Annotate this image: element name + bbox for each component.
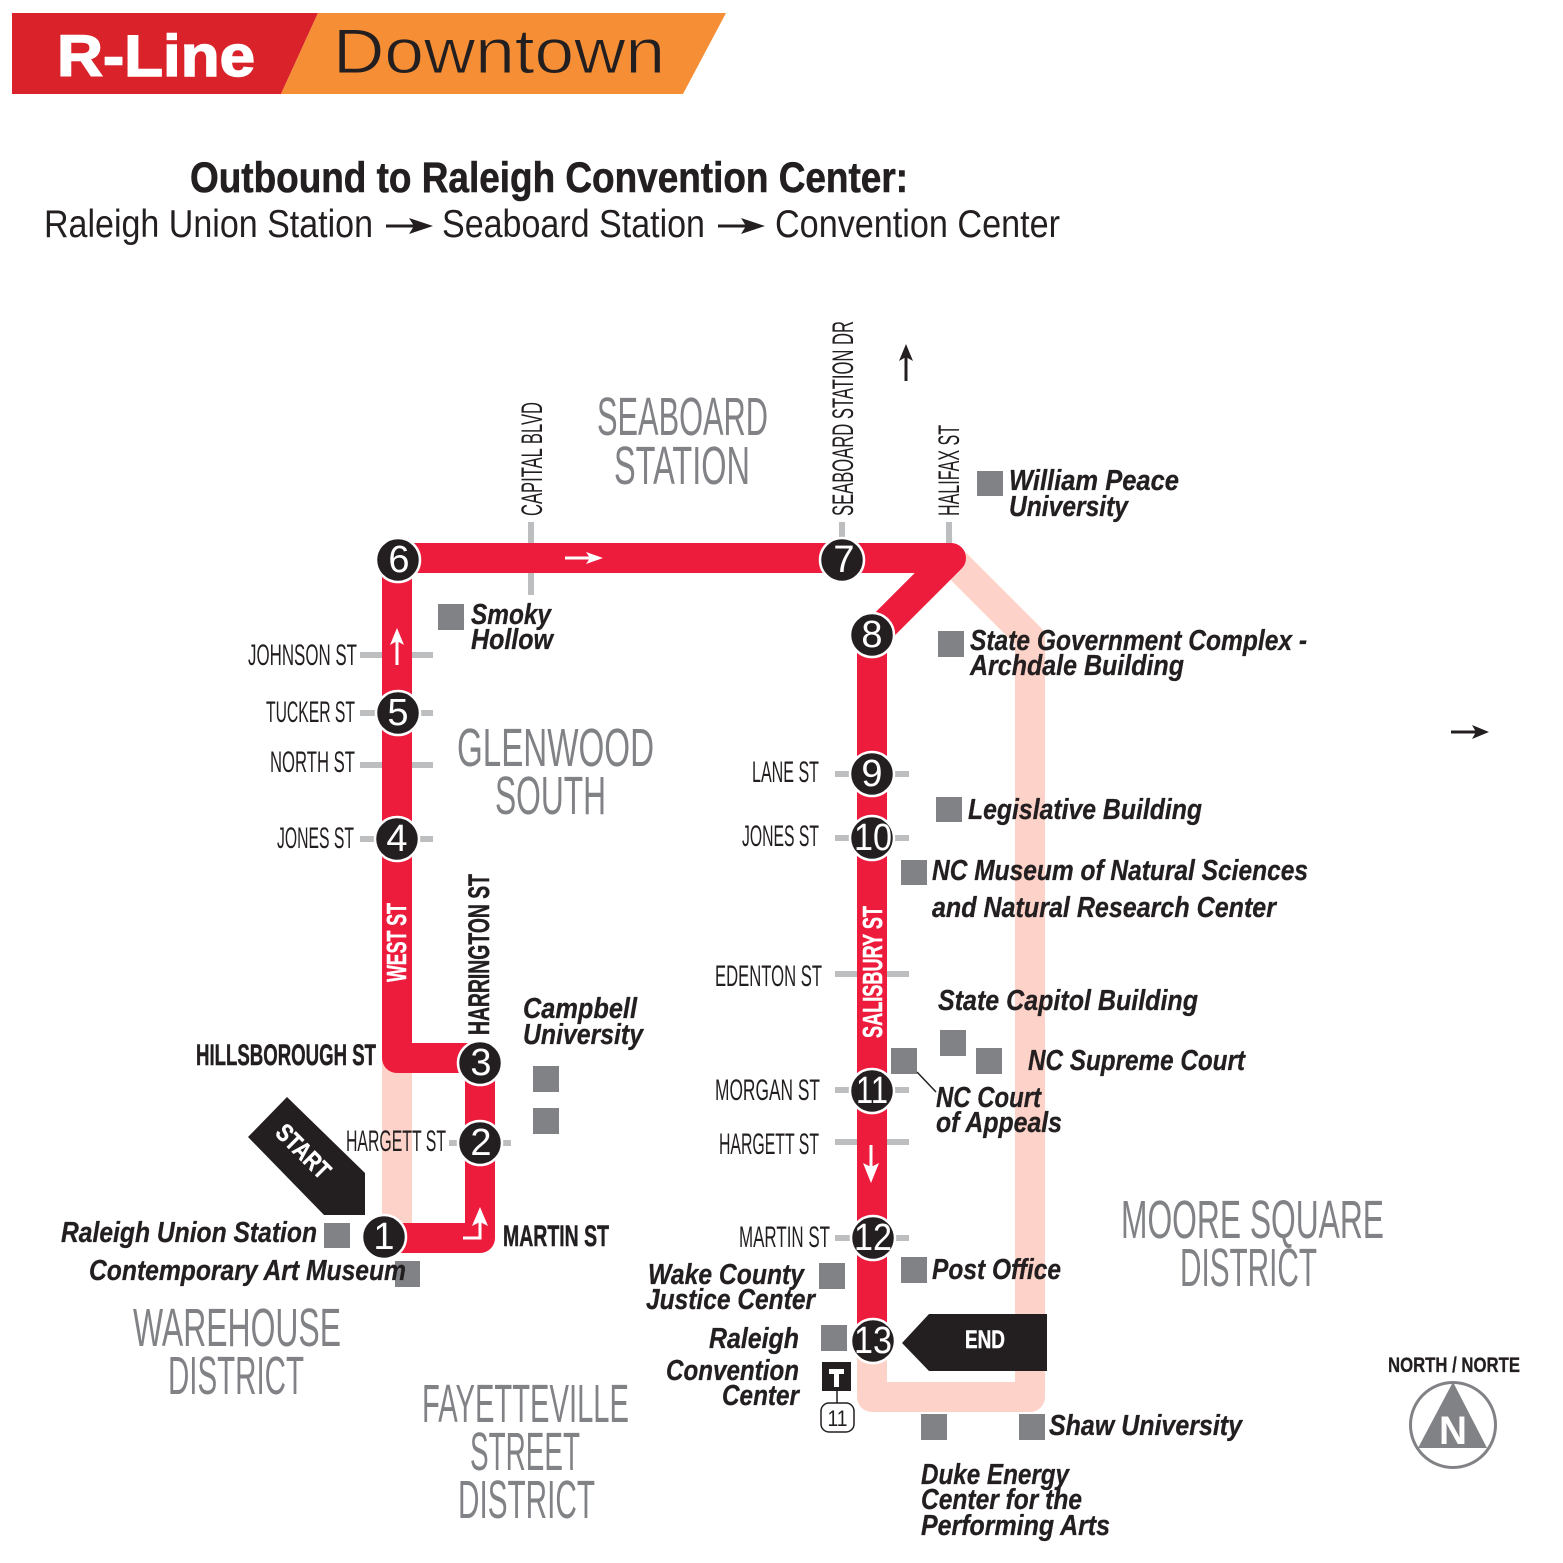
- compass triangle: [1418, 1382, 1487, 1448]
- route direction heading: [44, 154, 1060, 246]
- district: Moore Square: DISTRICT: [1180, 1238, 1317, 1298]
- district: Warehouse: [133, 1298, 341, 1406]
- compass label: NORTH / NORTE: [1388, 1354, 1520, 1377]
- Wake County Justice Center: [646, 1259, 816, 1316]
- district: Moore Square: MOORE SQUARE: [1121, 1190, 1384, 1250]
- district labels: [133, 387, 1384, 1530]
- start flag: START: [270, 1118, 336, 1185]
- cross street ticks: [360, 522, 949, 1238]
- NC Museum of Natural Sciences: and Natural Research Center: [932, 892, 1277, 924]
- street labels: horizontal east side: HARGETT ST: [719, 1128, 819, 1161]
- header banner: [12, 13, 726, 94]
- district: Glenwood South: [457, 718, 654, 826]
- district: Fayetteville Street: STREET: [470, 1422, 580, 1482]
- arrow to Seaboard Station: [386, 218, 433, 234]
- station numbers: 8: [861, 614, 883, 656]
- arrow to Convention Center: [718, 218, 765, 234]
- Duke Energy Center for the Performing Arts: Duke Energy: [921, 1459, 1071, 1491]
- Raleigh Union Station: Raleigh Union Station: [61, 1217, 317, 1249]
- station numbers: [373, 539, 892, 1362]
- pale segment east side: [872, 559, 1030, 1397]
- street labels: on-route names: [381, 903, 888, 1038]
- station markers: [362, 538, 895, 1363]
- Raleigh Convention Center: Raleigh: [709, 1323, 799, 1355]
- State Government Complex: [969, 625, 1307, 682]
- station numbers: 11: [856, 1070, 888, 1112]
- district: Glenwood South: GLENWOOD: [457, 718, 654, 778]
- Campbell University: [523, 993, 645, 1051]
- street labels: horizontal east side: LANE ST: [752, 756, 819, 789]
- origin label: Raleigh Union Station: [44, 203, 373, 246]
- street labels: vertical: CAPITAL BLVD: [516, 402, 549, 516]
- district: Seaboard Station: SEABOARD: [597, 387, 768, 447]
- NC Court of Appeals: NC Court: [936, 1082, 1042, 1114]
- banner orange segment: [281, 13, 726, 94]
- Wake County Justice Center: Justice Center: [646, 1284, 816, 1316]
- red segment from Martin St to Seaboard and back: [383, 558, 951, 1340]
- district: Warehouse: WAREHOUSE: [133, 1298, 341, 1358]
- station numbers: 2: [470, 1122, 492, 1164]
- street labels: horizontal west side: HARGETT ST: [346, 1125, 446, 1158]
- street labels: horizontal east side: MARTIN ST: [739, 1221, 830, 1254]
- NC Supreme Court: NC Supreme Court: [1028, 1045, 1246, 1077]
- street labels: horizontal east side: JONES ST: [742, 820, 819, 853]
- pale segment west side: [382, 1058, 412, 1238]
- station numbers: 5: [387, 692, 409, 734]
- street labels: horizontal west side: HILLSBOROUGH ST: [196, 1039, 376, 1072]
- banner red segment: [12, 13, 318, 94]
- off-map arrow: north: [899, 344, 913, 381]
- State Government Complex: Archdale Building: [969, 650, 1184, 682]
- station numbers: 4: [386, 818, 408, 860]
- Contemporary Art Museum: Contemporary Art Museum: [89, 1255, 406, 1287]
- Smoky Hollow: Smoky: [471, 599, 553, 631]
- street labels: horizontal west side: MARTIN ST: [503, 1220, 609, 1253]
- State Government Complex: State Government Complex -: [970, 625, 1307, 657]
- street labels: horizontal west side: NORTH ST: [270, 746, 355, 779]
- Campbell University: University: [523, 1019, 645, 1051]
- Wake County Justice Center: Wake County: [648, 1259, 806, 1291]
- banner label: Downtown: Downtown: [333, 17, 665, 87]
- middle stop label: Seaboard Station: [442, 203, 705, 246]
- district: Glenwood South: SOUTH: [495, 766, 606, 826]
- outbound route (red line): [383, 558, 951, 1340]
- station numbers: 12: [854, 1217, 892, 1259]
- district: Seaboard Station: STATION: [614, 436, 750, 496]
- street labels: horizontal east side: [715, 756, 830, 1254]
- Duke Energy Center for the Performing Arts: [921, 1459, 1110, 1542]
- transit icon with route 11: [821, 1362, 854, 1432]
- Legislative Building: Legislative Building: [968, 794, 1202, 826]
- landmark squares: [324, 471, 1045, 1440]
- Campbell University: Campbell: [523, 993, 638, 1025]
- NC Court of Appeals: of Appeals: [936, 1107, 1062, 1139]
- NC Museum of Natural Sciences: [932, 855, 1308, 924]
- street labels: vertical: SEABOARD STATION DR: [827, 321, 860, 516]
- district: Seaboard Station: [597, 387, 768, 496]
- Smoky Hollow: [471, 599, 555, 656]
- West St label: WEST ST: [381, 903, 412, 982]
- Duke Energy Center for the Performing Arts: Center for the: [921, 1484, 1082, 1516]
- Post Office: Post Office: [932, 1254, 1061, 1286]
- NC Court of Appeals: [936, 1082, 1062, 1139]
- street labels: horizontal west side: JOHNSON ST: [248, 639, 357, 672]
- start flag: [248, 1097, 365, 1215]
- arrow: north on West St: [390, 628, 404, 665]
- William Peace University: William Peace: [1009, 465, 1179, 497]
- station numbers: 6: [388, 539, 410, 581]
- arrow: south on Salisbury St: [863, 1145, 879, 1183]
- district: Fayetteville Street: FAYETTEVILLE: [422, 1374, 629, 1434]
- end flag: [902, 1314, 1047, 1371]
- end flag: END: [965, 1326, 1005, 1354]
- north compass: [1388, 1354, 1520, 1468]
- street labels: horizontal west side: JONES ST: [277, 822, 354, 855]
- Shaw University: Shaw University: [1049, 1410, 1244, 1442]
- district: Fayetteville Street: [422, 1374, 629, 1530]
- Smoky Hollow: Hollow: [471, 624, 555, 656]
- State Capitol Building: State Capitol Building: [938, 985, 1198, 1017]
- arrow: east on red line: [565, 552, 603, 564]
- station numbers: 3: [470, 1042, 492, 1084]
- landmark labels: [61, 465, 1308, 1542]
- Salisbury St label: SALISBURY ST: [857, 906, 888, 1038]
- compass ring: [1410, 1382, 1496, 1468]
- station numbers: 13: [854, 1320, 892, 1362]
- station numbers: 10: [854, 817, 892, 859]
- street labels: horizontal west side: [196, 639, 609, 1253]
- direction arrows on the route: [390, 552, 879, 1238]
- street labels: vertical: HALIFAX ST: [933, 425, 966, 516]
- inbound route (pale line): [397, 559, 1030, 1397]
- William Peace University: University: [1009, 491, 1130, 523]
- Duke Energy Center for the Performing Arts: Performing Arts: [921, 1510, 1110, 1542]
- district: Fayetteville Street: DISTRICT: [458, 1470, 595, 1530]
- street labels: horizontal east side: MORGAN ST: [715, 1074, 820, 1107]
- Raleigh Convention Center: Center: [722, 1380, 800, 1412]
- off-map arrow: east: [1451, 725, 1489, 739]
- connector: [836, 1391, 838, 1403]
- route 11 badge: 11: [828, 1406, 848, 1431]
- Raleigh Convention Center: Convention: [666, 1355, 799, 1387]
- street labels: horizontal east side: EDENTON ST: [715, 960, 822, 993]
- district: Warehouse: DISTRICT: [168, 1346, 304, 1406]
- street labels: vertical: HARRINGTON ST: [463, 874, 496, 1035]
- street labels: horizontal west side: TUCKER ST: [266, 696, 355, 729]
- NC Museum of Natural Sciences: NC Museum of Natural Sciences: [932, 855, 1308, 887]
- Raleigh Convention Center: [666, 1323, 800, 1412]
- destination label: Convention Center: [775, 203, 1060, 246]
- station numbers: 9: [861, 753, 883, 795]
- district: Moore Square: [1121, 1190, 1384, 1298]
- arrow: Martin St turn: [463, 1207, 488, 1238]
- banner label: R-Line: R-Line: [57, 24, 255, 89]
- station numbers: 7: [833, 539, 855, 581]
- William Peace University: [1009, 465, 1179, 523]
- street labels: vertical: [463, 321, 966, 1035]
- compass letter: N: [1439, 1409, 1467, 1453]
- leader line: NC Court of Appeals: [917, 1072, 936, 1092]
- T icon: [822, 1362, 851, 1391]
- heading bold line: Outbound to Raleigh Convention Center:: [190, 154, 908, 202]
- station numbers: 1: [373, 1216, 395, 1258]
